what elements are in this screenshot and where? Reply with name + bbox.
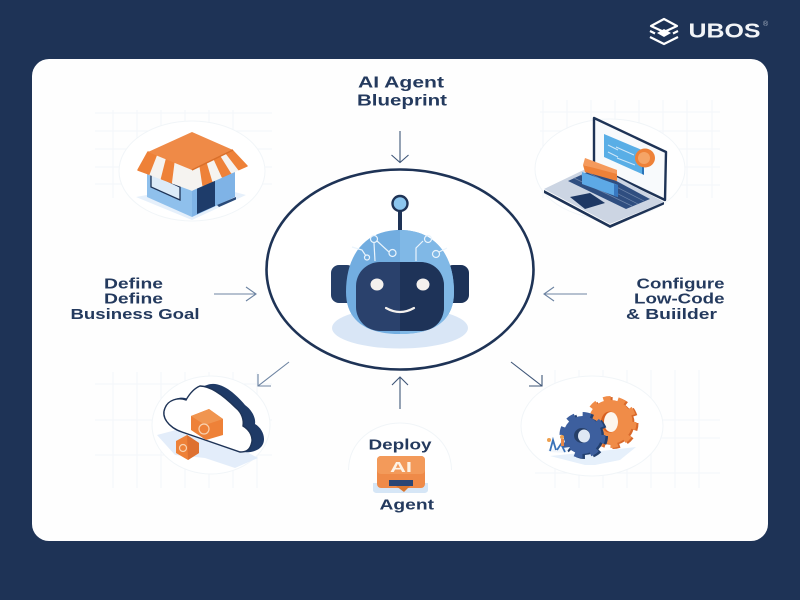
text: Define Business Goal — [70, 276, 200, 323]
icon: store — [119, 121, 265, 221]
node: deploy agent: Deploy — [368, 438, 432, 454]
text: Configure Low-Code & Builder: Low-Code — [634, 292, 724, 308]
main panel — [32, 59, 768, 541]
logo: UBOS: UBOS — [688, 20, 760, 42]
text: Configure Low-Code & Builder: Configure — [636, 276, 724, 292]
arrow: left to center — [214, 287, 256, 301]
arrow: top down — [392, 131, 408, 162]
title: AI Agent Blueprint: AI Agent — [358, 74, 444, 92]
awning stripes — [138, 150, 247, 190]
icon: gears — [521, 376, 663, 476]
text: Define Business Goal: Business Goal — [70, 307, 200, 323]
text: Define Business Goal: Define — [104, 292, 163, 308]
small figures — [547, 435, 570, 453]
node: deploy agent: Agent — [380, 498, 434, 514]
icon: cloud — [152, 376, 270, 474]
awning roof — [148, 132, 233, 170]
arrow: bottom up — [392, 377, 408, 409]
text: Configure Low-Code & Builder — [626, 276, 724, 323]
logo: UBOS: ® — [763, 20, 769, 28]
icon: AI chip: AI — [390, 459, 412, 476]
central circle — [266, 170, 534, 370]
text: Define Business Goal: Define — [104, 276, 163, 292]
arrow: to cloud — [258, 362, 289, 386]
title: AI Agent Blueprint: Blueprint — [357, 92, 447, 110]
arrow: right to center — [544, 287, 587, 301]
background grids — [95, 100, 720, 488]
arrow: to gears — [511, 362, 542, 386]
logo: UBOS — [650, 19, 769, 44]
node: deploy agent — [348, 423, 452, 514]
text: Configure Low-Code & Builder: & Buiilder — [626, 307, 717, 323]
blue gear — [562, 414, 606, 456]
icon: laptop — [535, 118, 685, 228]
orange gear — [587, 398, 636, 446]
title: AI Agent Blueprint — [357, 74, 447, 110]
icon: robot — [331, 196, 469, 348]
